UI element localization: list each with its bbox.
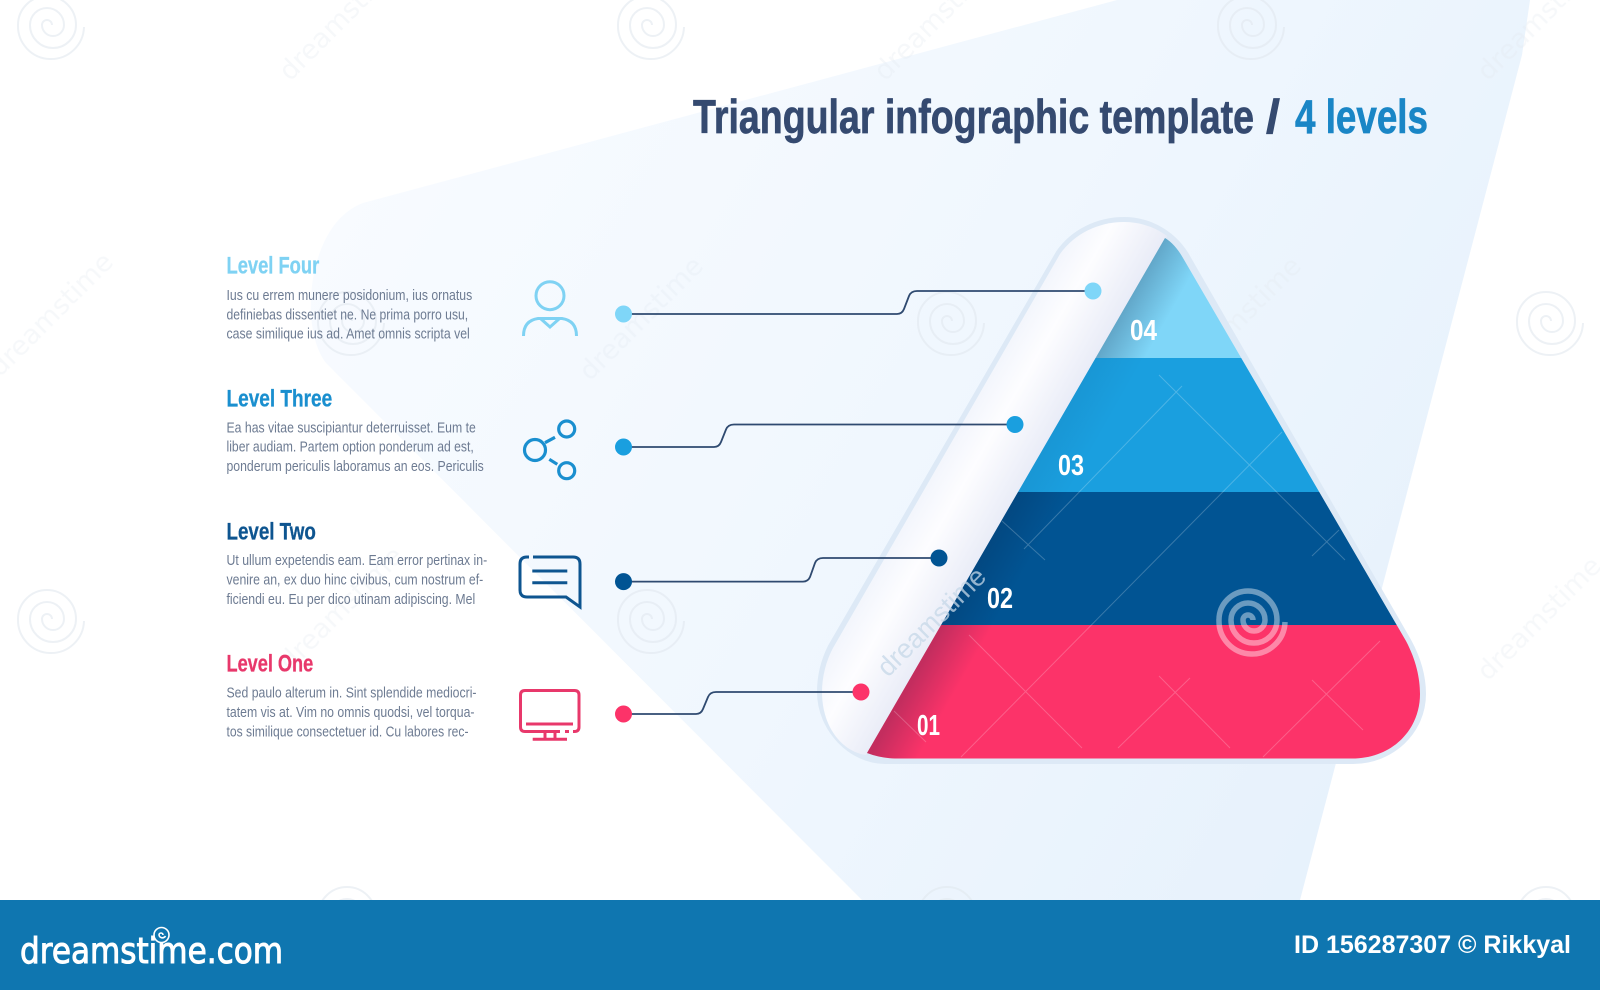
title: / <box>1266 90 1280 143</box>
number 02: 02 <box>987 583 1013 615</box>
text block: level two <box>226 552 487 608</box>
text block: level four: Ius cu errem munere posidonium, ius ornatus <box>226 287 472 304</box>
watermark: rotated dreamstime words: dreamstime <box>1171 250 1308 387</box>
text block: level one: Sed paulo alterum in. Sint splendide mediocri- <box>226 685 477 702</box>
text block: level two: venire an, ex duo hinc civibus, cum nostrum ef- <box>226 572 483 589</box>
panel: level three <box>226 386 1024 479</box>
connector: level three <box>615 416 1024 456</box>
panel: level one <box>226 651 870 741</box>
text block: level three: ponderum periculis laboramus an eos. Periculis <box>226 458 484 475</box>
icon: share nodes <box>524 421 575 479</box>
folded band <box>822 222 1167 755</box>
icon: chat bubble <box>520 557 580 607</box>
heading: level one: Level One <box>226 651 313 678</box>
connector: level one <box>615 684 870 722</box>
text block: level four: definiebas dissentiet ne. Ne prima porro usu, <box>226 306 468 323</box>
panel: level four <box>226 252 1102 342</box>
panel: level two <box>226 518 948 608</box>
pyramid bands <box>850 230 1450 760</box>
number 04: 04 <box>1130 315 1157 347</box>
footer logo: dreamstime.com <box>20 931 283 972</box>
text block: level three: Ea has vitae suscipiantur deterruisset. Eum te <box>226 419 476 436</box>
icon: monitor <box>520 690 579 739</box>
watermark word on pyramid: dreamstime <box>871 561 992 682</box>
heading: level four: Level Four <box>226 252 319 279</box>
footer image id: ID 156287307 © Rikkyal <box>1294 931 1571 959</box>
band 04 <box>1096 238 1242 358</box>
fold shadow on band 02 <box>941 492 1046 625</box>
fold shadow on band 01 <box>867 625 986 758</box>
fold shadow on band 03 <box>1018 358 1106 492</box>
text block: level one: tatem vis at. Vim no omnis quodsi, vel torqua- <box>226 704 474 721</box>
connector: level two <box>615 550 948 590</box>
band 01 <box>850 625 1450 760</box>
watermark lines over pyramid <box>894 375 1380 757</box>
pyramid outer outline <box>818 218 1425 763</box>
number 01: 01 <box>917 710 940 742</box>
text block: level four: case similique ius ad. Amet omnis scripta vel <box>226 325 470 342</box>
watermark: rotated dreamstime words <box>0 0 1600 687</box>
title: 4 levels <box>1295 90 1428 143</box>
watermark: rotated dreamstime words: dreamstime <box>273 540 410 677</box>
text block: level two: Ut ullum expetendis eam. Eam error pertinax in- <box>226 552 487 569</box>
number 03: 03 <box>1058 450 1084 482</box>
connector: level four <box>615 282 1102 322</box>
icon: person <box>524 282 576 336</box>
footer bar <box>0 900 1600 990</box>
watermark spiral on pyramid <box>1219 591 1285 654</box>
title: Triangular infographic template <box>693 90 1254 143</box>
fold shadow on band 04 <box>1096 238 1188 358</box>
heading: level two: Level Two <box>226 518 316 545</box>
icon: logo spiral <box>154 928 169 942</box>
text block: level two: ficiendi eu. Eu per dico utinam adipiscing. Mel <box>226 591 475 608</box>
text block: level one <box>226 685 477 741</box>
heading: level three: Level Three <box>226 386 332 413</box>
text block: level four <box>226 287 472 342</box>
background: pale blue rounded polygon <box>311 0 1530 900</box>
text block: level one: tos similique consectetuer id. Cu labores rec- <box>226 724 469 741</box>
band 03 <box>1018 358 1320 492</box>
text block: level three: liber audiam. Partem option ponderum ad est, <box>226 439 474 456</box>
text block: level three <box>226 419 484 475</box>
watermark: rotated dreamstime words: dreamstime <box>573 250 710 387</box>
pyramid chart <box>818 218 1450 763</box>
band 02 <box>941 492 1397 625</box>
